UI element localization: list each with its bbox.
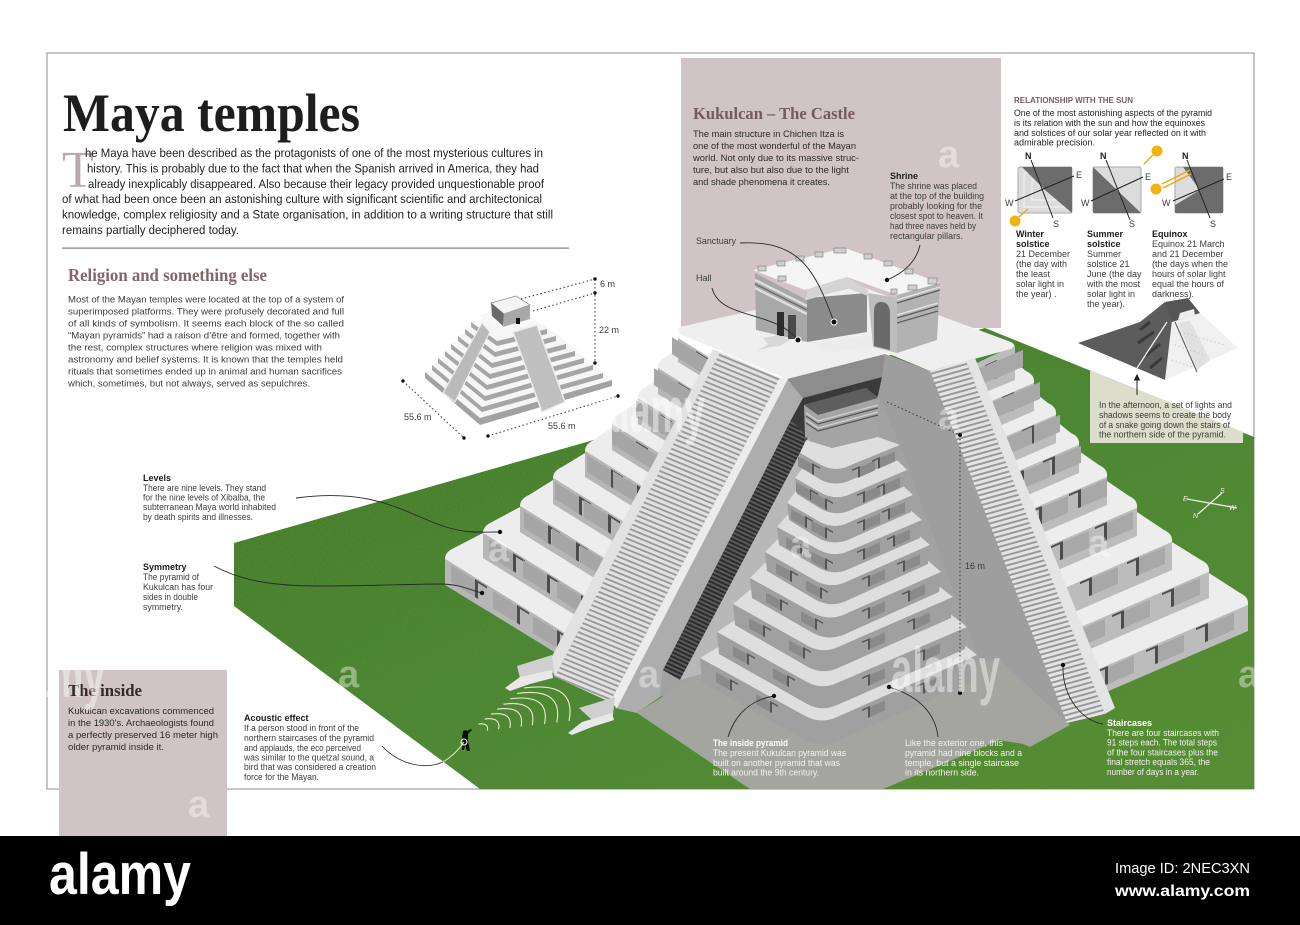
stock footer bar xyxy=(0,836,1300,925)
image id: Image ID: 2NEC3XN xyxy=(1115,861,1250,877)
callout: The inside pyramid: The present Kukulcan pyramid was xyxy=(713,748,846,758)
caption: summer: the year). xyxy=(1087,299,1125,309)
callout: Symmetry: sides in double xyxy=(143,592,198,602)
caption: summer: solstice xyxy=(1087,239,1121,249)
intro text block: knowledge, complex religiosity and a State organisation, in addition to a writing structure that still xyxy=(62,208,553,222)
sound waves xyxy=(478,687,570,731)
thumbnail staircases xyxy=(513,325,565,412)
inner pyramid tiers xyxy=(700,437,977,745)
diagram: winter solstice xyxy=(1005,151,1082,229)
caption: summer: Summer xyxy=(1087,249,1121,259)
callout: Acoustic effect: and applauds, the eco perceived xyxy=(244,743,361,753)
arrow to serpent xyxy=(1134,375,1140,395)
intro text block: of what had been once been an astonishing culture with significant scientific and architectonical xyxy=(62,192,542,206)
caption: equinox: (the days when the xyxy=(1152,259,1228,269)
diagram: summer solstice xyxy=(1081,146,1162,229)
caption: summer: Summer xyxy=(1087,229,1124,239)
cutaway interior xyxy=(615,354,1067,745)
callout: Staircases: 91 steps each. The total steps xyxy=(1107,738,1217,748)
text block: religion xyxy=(67,294,344,390)
intro xyxy=(1014,108,1212,148)
stock watermarks: a xyxy=(1088,523,1110,565)
title: Maya temples xyxy=(63,83,360,143)
callout: The inside pyramid: built around the 9th century. xyxy=(713,768,819,778)
text block: religion: the rest, complex structures where religion was mixed with xyxy=(68,342,322,354)
dimension lines xyxy=(401,277,620,440)
dimension labels xyxy=(404,279,619,431)
inner staircase xyxy=(663,420,808,680)
text block: religion: which, sometimes, but not always, served as sepulchres. xyxy=(67,378,310,390)
text block: Kukulcan xyxy=(692,129,859,188)
text block: religion: Most of the Mayan temples were located at the top of a system of xyxy=(68,294,344,306)
text block: Kukulcan: world. Not only due to its massive struc- xyxy=(692,153,859,164)
diagram: equinox xyxy=(1150,151,1232,229)
diagram: winter solstice: W xyxy=(1005,198,1014,208)
height dimension 16 m xyxy=(887,402,985,695)
intro text block: he Maya have been described as the protagonists of one of the most mysterious cultures in xyxy=(85,146,543,160)
diagram: winter solstice: S xyxy=(1053,219,1059,229)
body: older pyramid inside it. xyxy=(68,742,164,753)
grass ground xyxy=(234,328,1254,789)
body: in the 1930's. Archaeologists found xyxy=(68,718,214,729)
thumbnail temple xyxy=(491,296,530,327)
callout: Levels: Levels xyxy=(143,473,171,483)
caption: serpent: In the afternoon, a set of lights and xyxy=(1099,400,1232,410)
label: Sanctuary: Sanctuary xyxy=(696,236,736,246)
caption: summer: solar light in xyxy=(1087,289,1135,299)
body xyxy=(68,706,218,753)
page frame xyxy=(47,53,1254,789)
caption: serpent: shadows seems to create the body xyxy=(1099,410,1231,420)
footer logo: alamy xyxy=(49,842,191,907)
small pyramid with dimensions xyxy=(401,277,620,440)
inner pyramid side wall xyxy=(680,438,832,680)
caption: serpent: the northern side of the pyramid. xyxy=(1099,430,1226,440)
right stepped tiers xyxy=(956,345,1248,702)
caption: winter: the year) . xyxy=(1016,289,1057,299)
callout: Levels: for the nine levels of Xibalba, the xyxy=(143,492,265,502)
diagram: summer solstice: W xyxy=(1081,198,1090,208)
callout: Shrine: Shrine xyxy=(890,171,918,181)
stock watermarks: alamy xyxy=(598,374,705,446)
icon: compass xyxy=(1183,488,1237,520)
callout: Symmetry: Kukulcan has four xyxy=(143,582,213,592)
callout: Shrine: closest spot to heaven. It xyxy=(890,211,983,221)
caption: equinox: equal the hours of xyxy=(1152,279,1225,289)
caption: equinox: darkness). xyxy=(1152,289,1194,299)
caption: winter: 21 December xyxy=(1016,249,1070,259)
diagram: equinox: S xyxy=(1210,219,1216,229)
text block: religion: rituals that sometimes ended up in animal and human sacrifices xyxy=(68,366,342,378)
callout: Shrine xyxy=(890,171,984,241)
callout: Staircases: Staircases xyxy=(1107,718,1152,728)
text block: religion: superimposed platforms. They were profusely decorated and full xyxy=(68,306,344,318)
text block: Kukulcan: one of the most wonderful of the Mayan xyxy=(693,141,856,152)
callout: Acoustic effect: was similar to the quetzal sound, a xyxy=(243,752,374,762)
heading: The inside xyxy=(68,681,142,700)
text block: religion: of all kinds of symbolism. It seems each block of the so called xyxy=(68,318,344,330)
main pyramid cutaway xyxy=(445,248,1248,789)
callout: exterior comparison: Like the exterior one, this xyxy=(905,738,1003,748)
dimension labels: 55.6 m xyxy=(404,412,432,422)
caption: winter: solar light in xyxy=(1016,279,1064,289)
callout: Levels: There are nine levels. They stand xyxy=(143,483,266,493)
label: Hall: Hall xyxy=(696,273,712,283)
callout: Symmetry xyxy=(143,562,213,612)
icon: clapping person xyxy=(462,729,472,751)
stone ground of inner pyramid xyxy=(637,660,1070,789)
intro text block xyxy=(62,142,553,237)
callout: exterior comparison: temple, but a single staircase xyxy=(905,758,1019,768)
callout: Shrine: probably looking for the xyxy=(890,201,982,211)
left staircase xyxy=(505,349,788,735)
intro text block: history. This is probably due to the fact that when the Spanish arrived in America, they had xyxy=(87,162,539,176)
icon: compass: S xyxy=(1220,488,1225,495)
callout: Levels: by death spirits and illnesses. xyxy=(143,512,253,522)
temple on top xyxy=(753,248,940,353)
diagram: summer solstice: E xyxy=(1145,172,1151,182)
callout: Shrine: The shrine was placed xyxy=(890,181,977,191)
panel: Kukulcan background xyxy=(681,58,1001,328)
dimension labels: 22 m xyxy=(599,325,619,335)
text block: Kukulcan: and shade phenomena it creates. xyxy=(693,177,830,188)
callout: Acoustic effect: bird that was considered a creation xyxy=(244,762,376,772)
intro: and solstices of our solar year reflected on it with xyxy=(1014,128,1206,138)
height dimension 16 m: 16 m xyxy=(965,561,985,571)
heading: RELATIONSHIP WITH THE SUN xyxy=(1014,95,1133,105)
callout: Acoustic effect: northern staircases of the pyramid xyxy=(244,733,374,743)
caption: winter xyxy=(1016,229,1070,299)
caption: summer: with the most xyxy=(1086,279,1141,289)
diagram: equinox: W xyxy=(1162,198,1171,208)
caption: serpent: of a snake going down the stairs of xyxy=(1099,420,1230,430)
callout: Shrine: had three naves held by xyxy=(890,221,976,231)
callout: Shrine: at the top of the building xyxy=(890,191,984,201)
callout: Staircases xyxy=(1107,718,1219,777)
intro: admirable precision. xyxy=(1014,138,1095,148)
stock watermarks: a xyxy=(938,396,960,438)
inner temple block xyxy=(804,388,878,448)
caption: winter: (the day with xyxy=(1016,259,1067,269)
caption: winter: the least xyxy=(1016,269,1051,279)
intro text block: already inexplicably disappeared. Also because their legacy provided unquestionable proof xyxy=(88,177,544,191)
caption: winter: Winter xyxy=(1016,229,1044,239)
intro text block: remains partially deciphered today. xyxy=(62,223,239,237)
text block: religion: “Mayan pyramids” had a raison d’être and formed, together with xyxy=(68,330,340,342)
leaders xyxy=(214,243,1103,766)
heading: Kukulcan – The Castle: Kukulcan – The Castle xyxy=(693,104,855,123)
diagram: equinox: N xyxy=(1182,151,1188,161)
stock watermarks: a xyxy=(638,654,660,696)
callout: Acoustic effect: force for the Mayan. xyxy=(244,772,319,782)
stock watermarks: a xyxy=(790,524,812,566)
caption: winter: solstice xyxy=(1016,239,1050,249)
dimension labels: 6 m xyxy=(600,279,615,289)
stock watermarks: a xyxy=(938,134,960,176)
stock watermarks: alamy xyxy=(0,639,105,711)
stock watermarks: a xyxy=(338,654,360,696)
right staircase xyxy=(930,358,1115,723)
stock watermarks xyxy=(0,134,1260,826)
callout: Acoustic effect xyxy=(243,713,376,782)
callout: exterior comparison: pyramid had nine blocks and a xyxy=(905,748,1022,758)
body: a perfectly preserved 16 meter high xyxy=(68,730,218,741)
diagram: serpent shadow pyramid xyxy=(1078,298,1238,380)
callout: Staircases: number of days in a year. xyxy=(1107,767,1199,777)
caption: equinox: hours of solar light xyxy=(1152,269,1226,279)
diagram: equinox: E xyxy=(1226,172,1232,182)
panel: snake caption background xyxy=(1090,370,1243,443)
drop cap: T xyxy=(62,142,94,199)
caption: summer: solstice 21 xyxy=(1087,259,1130,269)
icon: compass: W xyxy=(1229,505,1237,512)
callout: exterior comparison: in its northern side. xyxy=(905,768,979,778)
stock watermarks: a xyxy=(488,528,510,570)
heading: Religion and something else: Religion and something else xyxy=(68,265,267,285)
callout: Staircases: of the four staircases plus the xyxy=(1107,748,1218,758)
text block: Kukulcan: ture, but also but also due to the light xyxy=(693,165,849,176)
caption: equinox xyxy=(1152,229,1228,299)
callout: exterior comparison xyxy=(905,738,1022,778)
callout: Acoustic effect: Acoustic effect xyxy=(244,713,309,723)
callout: Levels: subterranean Maya world inhabited xyxy=(143,502,276,512)
stock watermarks: a xyxy=(1238,654,1260,696)
callout: The inside pyramid: built on another pyramid that was xyxy=(713,758,840,768)
panel: The inside xyxy=(59,670,227,836)
text block: religion: astronomy and belief systems. It is known that the temples held xyxy=(68,354,343,366)
stock watermarks: alamy xyxy=(891,634,1000,706)
text block: Kukulcan: The main structure in Chichen Itza is xyxy=(693,129,844,140)
section: relationship with the sun xyxy=(1005,95,1238,440)
callout: The inside pyramid xyxy=(713,738,846,778)
stock watermarks: a xyxy=(188,784,210,826)
callout: Symmetry: The pyramid of xyxy=(143,572,199,582)
icon: compass: N xyxy=(1193,513,1199,520)
caption: equinox: and 21 December xyxy=(1152,249,1224,259)
caption: serpent xyxy=(1099,400,1232,440)
callout: Staircases: There are four staircases with xyxy=(1107,728,1219,738)
diagram: winter solstice: N xyxy=(1025,151,1032,161)
icon: compass: E xyxy=(1183,496,1188,503)
callout: Symmetry: Symmetry xyxy=(143,562,187,572)
thumbnail tiers xyxy=(425,307,612,425)
dimension labels: 55.6 m xyxy=(548,421,576,431)
website: www.alamy.com xyxy=(1114,883,1250,900)
callout: Staircases: final stretch equals 365, the xyxy=(1107,757,1210,767)
top platform xyxy=(678,286,1014,379)
callout: Symmetry: symmetry. xyxy=(143,602,183,612)
caption: equinox: Equinox 21 March xyxy=(1152,239,1225,249)
diagram: winter solstice: E xyxy=(1076,170,1082,180)
callout: Levels xyxy=(143,473,276,522)
caption: summer xyxy=(1086,229,1142,309)
diagram: summer solstice: S xyxy=(1129,219,1135,229)
left stepped tiers xyxy=(445,336,724,662)
caption: equinox: Equinox xyxy=(1152,229,1188,239)
intro: One of the most astonishing aspects of the pyramid xyxy=(1014,108,1212,118)
intro: is its relation with the sun and how the equinoxes xyxy=(1014,118,1205,128)
callout: Acoustic effect: If a person stood in front of the xyxy=(244,723,359,733)
divider xyxy=(62,248,569,249)
callout: Shrine: rectangular pillars. xyxy=(890,231,963,241)
caption: summer: June (the day xyxy=(1087,269,1142,279)
callout: The inside pyramid: The inside pyramid xyxy=(713,738,788,748)
diagram: summer solstice: N xyxy=(1100,151,1106,161)
body: Kukulcan excavations commenced xyxy=(68,706,214,717)
